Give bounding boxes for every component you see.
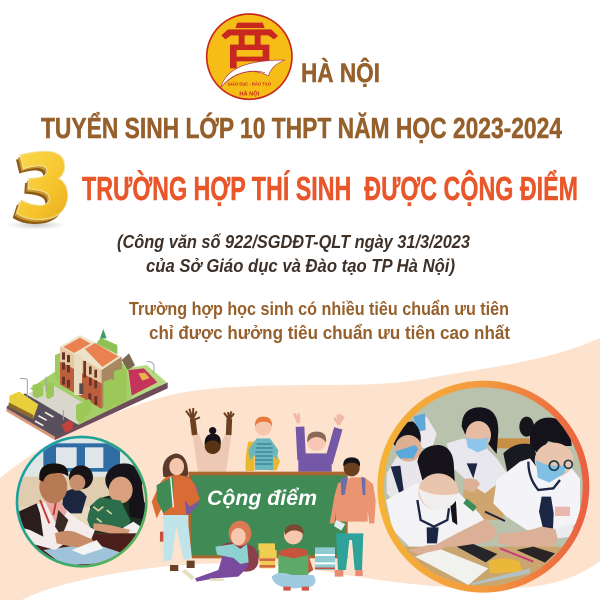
text block: official document reference: của Sở Giáo dục và Đào tạo TP Hà Nội) [146,256,455,276]
board label: Cộng điểm [207,487,317,510]
student: boy raising arms [294,413,344,472]
student: boy with striped shirt and backpack [246,417,280,471]
photo: masked students in classroom (right circle) [377,381,589,593]
logo: Hanoi education department: GIÁO DỤC - ĐÀO TẠO [228,80,271,87]
text block: priority note: Trường hợp học sinh có nhiều tiêu chuẩn ưu tiên [129,298,509,319]
icon: gold number 3 [7,151,68,230]
books beside board [159,532,167,550]
illustration: students around green board [152,408,376,591]
books stack right of board [315,547,335,570]
photo: students writing (left circle) [16,436,150,570]
text block: priority note [129,298,510,343]
student: reading girl [182,521,277,582]
student: standing boy with backpack [330,457,376,577]
logo: Hanoi education department [207,14,292,99]
student: girl with glasses [152,453,200,571]
student: reading boy [272,524,315,591]
board: Cộng điểm [188,472,348,558]
logo: Hanoi education department: HÀ NỘI [239,89,260,97]
background peach wave [0,338,600,600]
text block: official document reference: (Công văn số 922/SGDĐT-QLT ngày 31/3/2023 [117,232,470,252]
illustration: isometric school building [7,329,168,440]
text block: official document reference [117,232,470,276]
heading: Hà Nội: HÀ NỘI [301,57,380,88]
text block: priority note: chỉ được hưởng tiêu chuẩn ưu tiên cao nhất [149,322,510,343]
student: raised hands girl [186,408,234,472]
